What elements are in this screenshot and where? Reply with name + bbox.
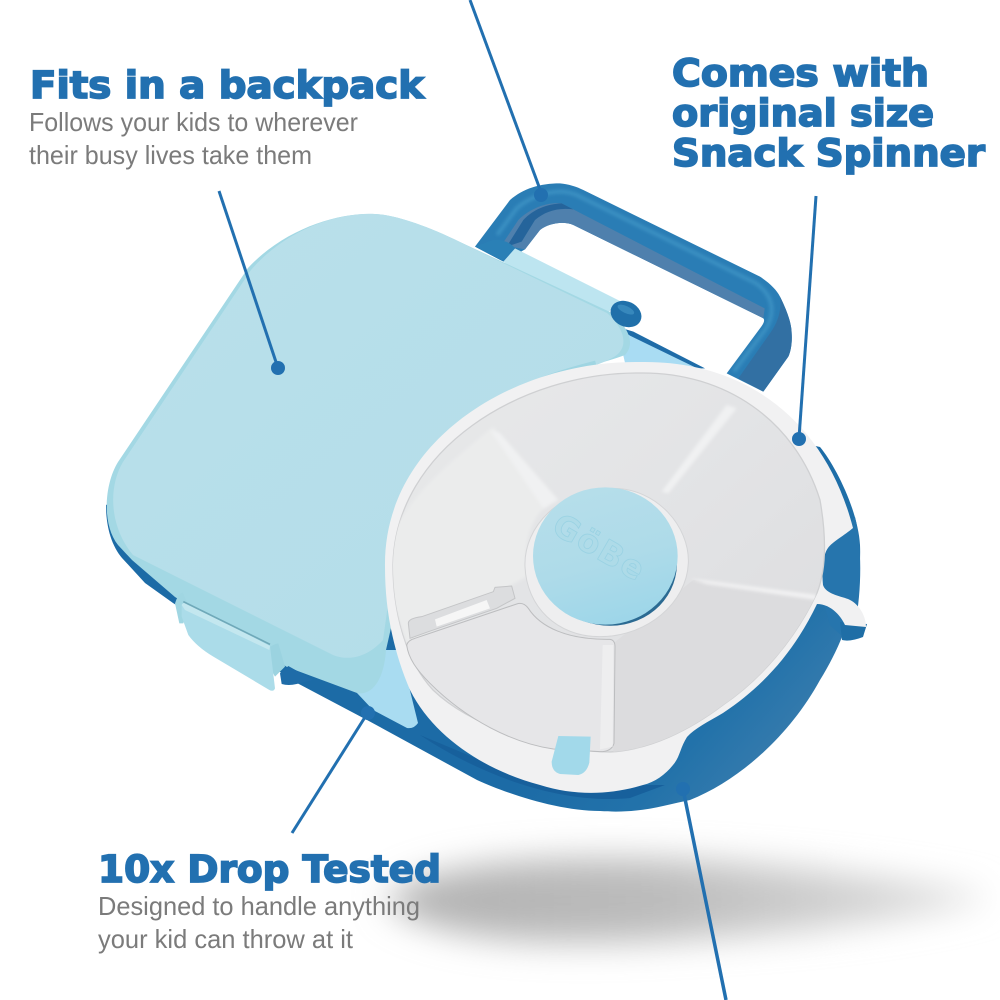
- heading: 10x Drop Tested: [98, 848, 441, 891]
- base body: [106, 400, 860, 812]
- window inner divider: [600, 645, 613, 749]
- tray details: [380, 405, 823, 767]
- tray strip below lid: [357, 650, 418, 728]
- description line 2: their busy lives take them: [29, 140, 312, 170]
- leader line: [292, 706, 375, 833]
- spoke 2: [662, 405, 737, 493]
- leader line: top handle: [470, 0, 548, 202]
- leader line: [792, 196, 816, 446]
- leader line: [219, 191, 285, 375]
- heading line 2: original size: [672, 92, 934, 135]
- leader line: bottom base: [676, 782, 726, 1000]
- description: Follows your kids to wherever: [29, 107, 358, 137]
- description line 2: your kid can throw at it: [98, 924, 354, 954]
- lid side: [107, 214, 630, 693]
- tray inner: [393, 373, 825, 752]
- hub ring: [525, 488, 688, 637]
- lunchbox product illustration: [106, 183, 867, 812]
- snack spinner disc: [380, 362, 866, 793]
- hinge: [408, 586, 515, 638]
- spout shadow: [840, 622, 867, 641]
- callout: snack spinner: [672, 52, 986, 446]
- spoke 3: [699, 580, 816, 600]
- tab: [552, 736, 591, 775]
- lid top face: [113, 214, 623, 658]
- button dome: [533, 487, 678, 625]
- description: Designed to handle anything: [98, 891, 420, 921]
- left compartment highlight: [393, 516, 406, 642]
- heading line 3: Snack Spinner: [672, 132, 986, 175]
- front latch: [175, 592, 313, 691]
- callout: drop tested: [98, 706, 441, 954]
- base dark inner rim: [420, 735, 665, 799]
- white rim: [385, 362, 866, 793]
- blue side notch: [820, 517, 860, 640]
- lower wedge: [614, 600, 813, 752]
- button base: [516, 473, 696, 646]
- handle hinge knob: [606, 296, 646, 332]
- spoke 1: [510, 448, 556, 503]
- lid window: [407, 603, 615, 752]
- button logo: GöBe: [546, 506, 652, 589]
- tray strip behind lid top: [475, 240, 705, 370]
- lid inner edge along disc: [394, 364, 596, 522]
- callout: fits in a backpack: [29, 64, 425, 375]
- ground shadow: [385, 858, 992, 943]
- heading: Comes with: [672, 52, 929, 95]
- spinner center details: [407, 473, 696, 775]
- handle: [475, 183, 792, 392]
- heading: Fits in a backpack: [30, 64, 425, 107]
